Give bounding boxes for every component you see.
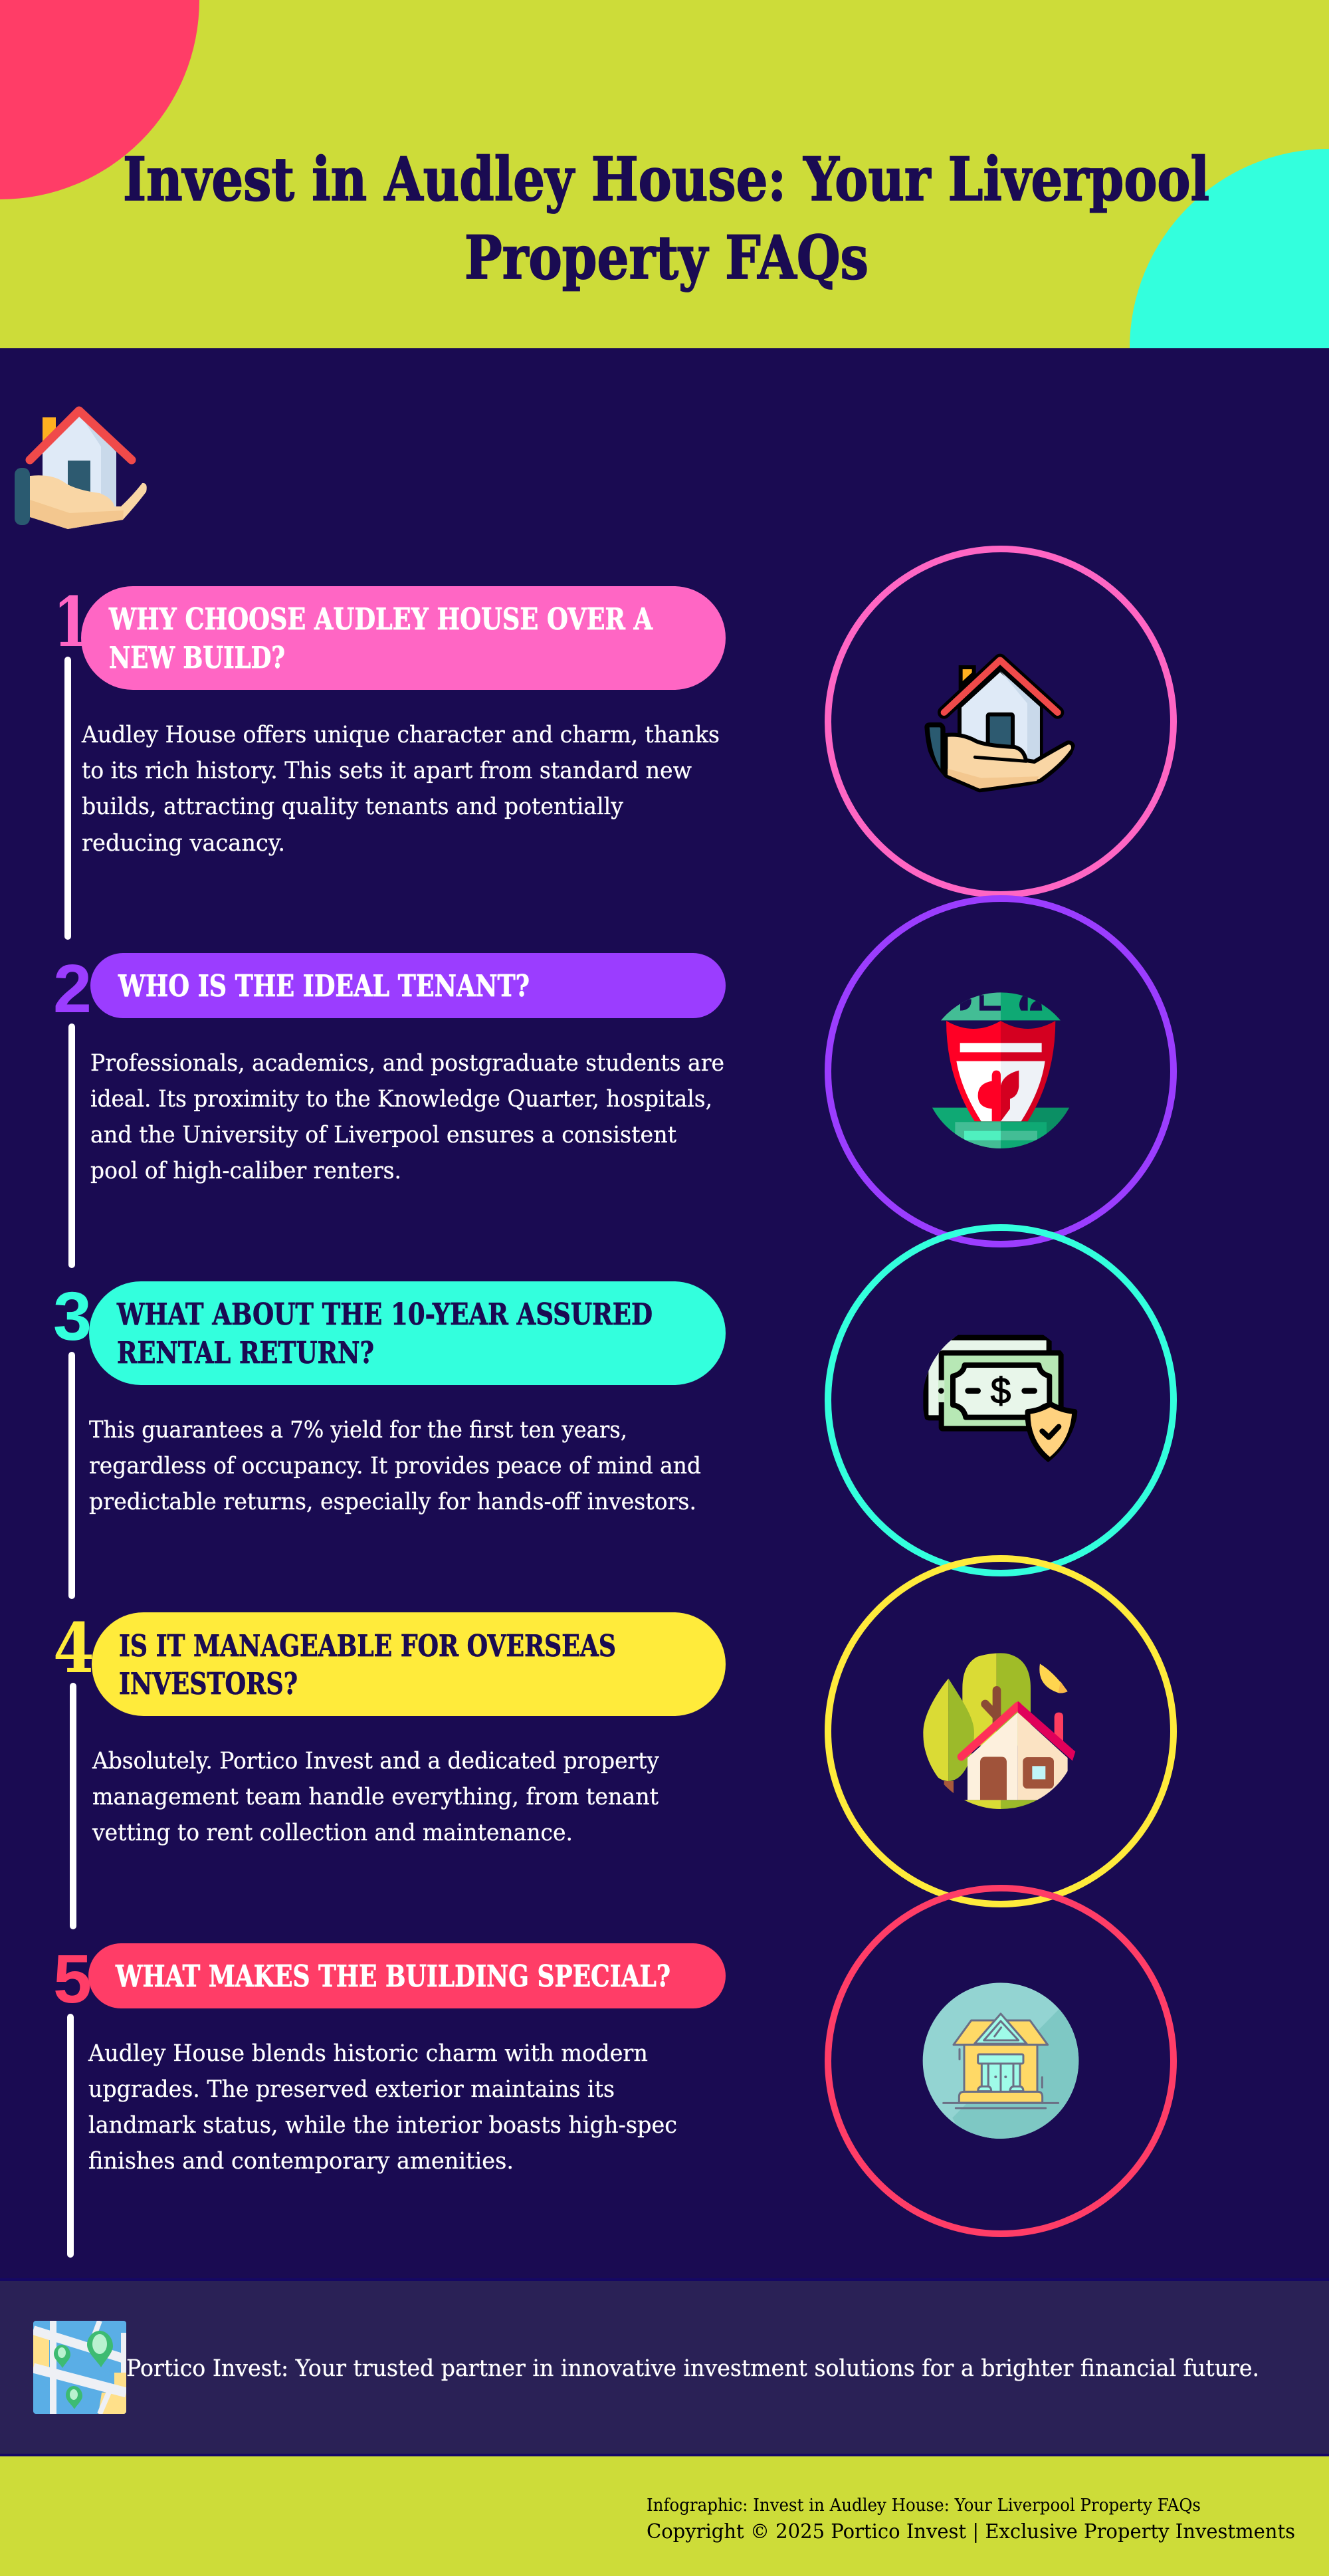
question pill 5: WHAT MAKES THE BUILDING SPECIAL? [115,1959,670,1994]
answer text 5: finishes and contemporary amenities. [88,2148,514,2175]
question pill 1 [81,586,726,690]
answer text 2: ideal. Its proximity to the Knowledge Quarter, hospitals, [90,1086,712,1113]
icon: map with pins [33,2321,126,2414]
title: Property FAQs [464,223,869,293]
ring 3 [828,1228,1174,1573]
vertical bar 3 [68,1352,75,1599]
answer text 2: pool of high-caliber renters. [90,1158,401,1184]
icon: banknotes with shield: $ [991,1370,1011,1412]
number 3: 3 [53,1278,92,1354]
question pill 1: WHY CHOOSE AUDLEY HOUSE OVER A [108,601,653,637]
title [123,144,1209,293]
answer text 1 [81,722,720,857]
question pill 3: WHAT ABOUT THE 10-YEAR ASSURED [116,1297,653,1332]
vertical bar 4 [70,1683,76,1929]
footer credit: Infographic: Invest in Audley House: Your Liverpool Property FAQs [647,2496,1201,2516]
answer text 1: builds, attracting quality tenants and potentially [82,794,623,820]
answer text 4: Absolutely. Portico Invest and a dedicated property [92,1748,659,1774]
question pill 4: INVESTORS? [119,1666,298,1701]
answer text 1: Audley House offers unique character and charm, thanks [81,722,720,748]
footer [0,2456,1329,2576]
number 4: 4 [53,1608,94,1689]
copyright: Copyright © 2025 Portico Invest | Exclusive Property Investments [647,2520,1295,2543]
icon: banknotes with shield [926,1338,1074,1460]
panel: FAQ 5 [53,1941,726,2258]
panel: partner band [0,2278,1329,2456]
ring 2 [828,899,1174,1244]
ring 1 [828,549,1174,895]
question pill 3 [89,1281,726,1385]
question pill 1: NEW BUILD? [109,640,285,675]
answer text 5: upgrades. The preserved exterior maintains its [88,2076,615,2103]
question pill 4: IS IT MANAGEABLE FOR OVERSEAS [119,1628,616,1664]
answer text 4 [92,1748,659,1846]
answer text 5: landmark status, while the interior boasts high-spec [88,2112,677,2139]
number 2: 2 [53,950,92,1027]
answer text 3: predictable returns, especially for hands-off investors. [89,1489,696,1515]
question pill 5 [88,1943,726,2008]
partner statement: Portico Invest: Your trusted partner in innovative investment solutions for a brighter financial future. [126,2355,1259,2382]
answer text 2: and the University of Liverpool ensures a consistent [90,1122,676,1148]
answer text 3 [89,1417,701,1515]
panel: FAQ 4 [53,1608,726,1929]
panel: FAQ 3 [53,1278,726,1599]
panel: FAQ 2 [53,950,726,1268]
answer text 3: This guarantees a 7% yield for the first ten years, [89,1417,627,1444]
answer text 1: to its rich history. This sets it apart from standard new [82,758,692,784]
icon: small hand holding house [15,411,147,529]
question pill 2 [90,953,726,1018]
answer text 2: Professionals, academics, and postgraduate students are [90,1050,724,1077]
vertical bar 5 [67,2014,74,2258]
question pill 4 [92,1612,726,1716]
number 5: 5 [53,1941,92,2017]
answer text 5 [88,2040,677,2175]
vertical bar 1 [64,657,71,940]
answer text 4: vetting to rent collection and maintenance. [92,1820,573,1846]
question pill 3: RENTAL RETURN? [117,1335,374,1370]
answer text 5: Audley House blends historic charm with modern [88,2040,648,2067]
icon: hand holding house [927,660,1073,790]
vertical bar 2 [68,1023,75,1268]
decorative circle: coral [0,0,199,199]
question pill 2: WHO IS THE IDEAL TENANT? [118,968,530,1004]
number 1: 1 [53,582,90,663]
panel: FAQ 1 [53,582,726,940]
icon: historic building in circle [922,1983,1079,2139]
icon: university crest shield [932,992,1069,1148]
icon: house with trees [923,1653,1075,1813]
answer text 2 [90,1050,724,1184]
ring 5 [828,1888,1174,2234]
ring 4 [828,1558,1174,1904]
decorative circle: turquoise [1130,149,1329,348]
header banner [0,0,1329,348]
answer text 4: management team handle everything, from tenant [92,1784,659,1810]
answer text 1: reducing vacancy. [82,830,285,857]
answer text 3: regardless of occupancy. It provides peace of mind and [89,1453,701,1479]
